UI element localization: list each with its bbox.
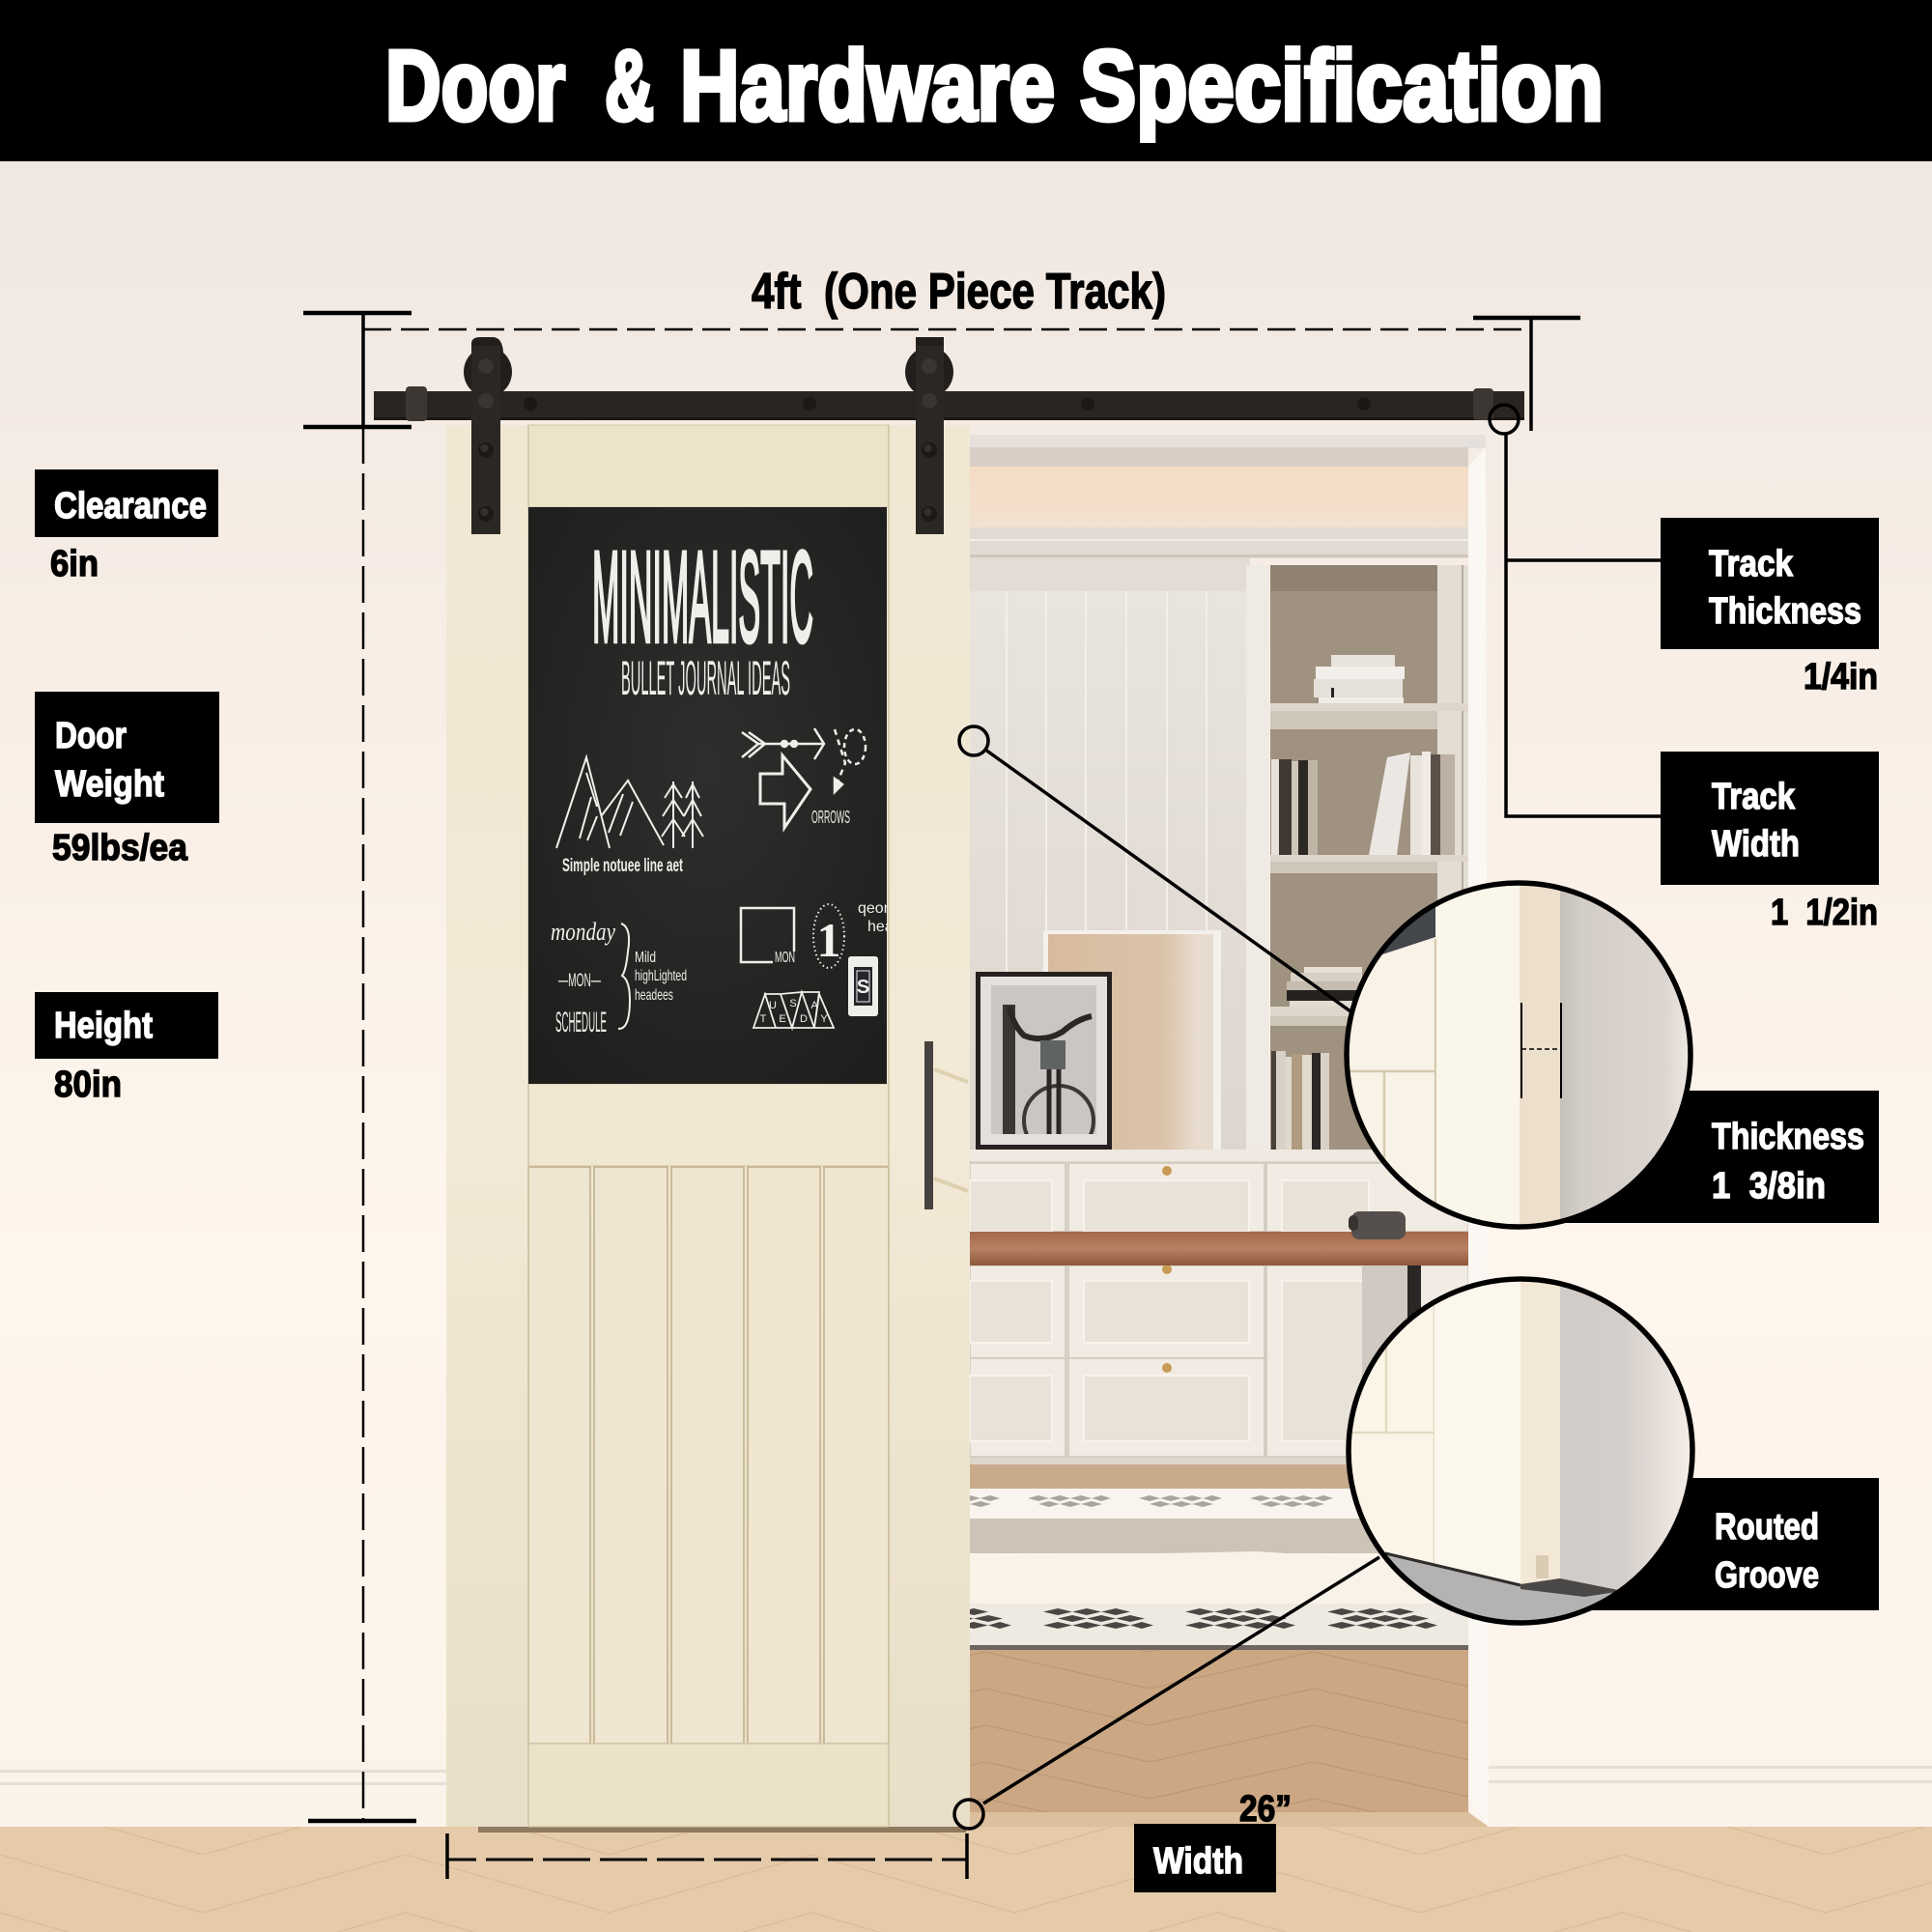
callout: track thickness [1661,518,1879,697]
callout: width: Width [1153,1841,1243,1882]
door floor shadow [478,1827,966,1833]
chalk bunting: tuesday: A [810,1000,818,1011]
callout: width [1134,1789,1292,1892]
chalk S tile: S [857,977,869,998]
callout: door weight [35,692,219,868]
title: Door [385,30,565,141]
cabinets [970,1161,1468,1464]
chalk mountains and trees [556,757,703,848]
callout: track width: Width [1712,824,1800,865]
chalk bunting: tuesday: Y [820,1013,828,1025]
title: & [605,30,654,141]
black title bar [0,0,1932,161]
chalk note: mild highlighted headers [636,951,686,1000]
chalk bunting: tuesday [753,992,834,1028]
thickness marker [1521,1003,1561,1098]
door width dimension line [447,1833,967,1879]
middle rail [528,1084,889,1166]
panelled wall [970,565,1269,1154]
books lower shelf [1287,967,1362,1007]
chalk note: geometric headers: qeom [858,900,896,917]
callout: door thickness: 1 3/8in [1712,1166,1826,1207]
door handle [924,1041,933,1209]
chalk script: monday: monday [551,918,615,946]
books middle shelf left [1271,759,1318,855]
floor [0,1827,1932,1932]
callout: door weight: Weight [55,764,164,805]
chalk MON box [741,908,795,966]
bicycle photo frame [976,972,1112,1155]
callout: height: 80in [54,1065,122,1105]
clearance dimension bracket [303,313,412,427]
track rail [374,391,1524,420]
wooden desk [970,1232,1468,1265]
chalk numeral in dotted circle [813,904,844,968]
chalk note: geometric headers: head [867,919,902,935]
beige art frame [1043,930,1221,1150]
track stop right [1473,388,1493,420]
title: Specification [1080,30,1604,141]
barn door [446,425,970,1827]
callout: door thickness [1546,1091,1879,1223]
leader: routed groove detail [954,1557,1379,1829]
books middle shelf right [1369,752,1455,855]
callout: track width [1661,752,1879,933]
track callout leader lines [1490,405,1661,816]
left hanger [464,337,512,534]
detail circle: routed groove [1347,1277,1694,1633]
ceiling soffit [970,435,1486,528]
desk cup [1349,1211,1406,1239]
title [385,30,1604,141]
callout: clearance [35,469,218,584]
bookshelf [1270,565,1468,1150]
chalk caption: nature line art: Simple notuee line aet [562,856,683,876]
vertical panels [528,1167,889,1744]
bottom rail [528,1744,889,1827]
text: BULLET JOURNAL IDEAS [621,651,790,705]
callout: clearance: Clearance [54,486,207,526]
callout: door weight: 59lbs/ea [52,828,188,868]
track length dimension line [363,318,1580,431]
top rail [528,425,889,507]
chalk note: mild highlighted headers: Mild [635,950,656,966]
callout: track thickness: Track [1709,544,1794,584]
cornice [970,527,1468,591]
callout: routed groove: Routed [1715,1507,1819,1548]
track stop left [406,386,427,421]
baseboard right [1489,1760,1932,1827]
chalkboard panel: ORROWS [811,808,850,827]
callout: clearance: 6in [50,544,99,584]
callout: width: 26” [1239,1789,1292,1830]
room seen through doorway [970,435,1489,1827]
chalk arrows [742,728,866,828]
baseboard left [0,1763,446,1827]
text: MINIMALISTIC [592,526,813,669]
chalk note: mild highlighted headers: highLighted [635,968,687,984]
counter top strip [970,1150,1468,1161]
chalkboard panel: SCHEDULE [555,1007,607,1038]
chalk S tile [848,956,878,1016]
callout: height [35,992,218,1105]
title: Hardware [680,30,1055,141]
callout: track width: Track [1712,777,1796,817]
chalkboard panel [528,507,902,1084]
detail circle: door edge thickness [1346,882,1692,1228]
callout: track thickness: 1/4in [1804,657,1878,697]
door stile edges [528,425,889,1827]
callout: routed groove: Groove [1715,1555,1819,1596]
callout: height: Height [54,1006,153,1046]
chalk bunting: tuesday: D [800,1013,808,1025]
center hanger [905,337,953,534]
chalk MON box: MON [775,950,795,966]
leader: door thickness detail [959,726,1350,1011]
chalk bunting: tuesday: S [789,998,797,1009]
track bolts [524,397,1371,411]
room floor and rug [970,1464,1489,1827]
callout: track thickness: Thickness [1709,591,1861,632]
track length label: 4ft (One Piece Track) [752,264,1166,320]
chalk bunting: tuesday: T [760,1013,767,1025]
door handle shadows [934,1069,968,1191]
door jamb [1468,447,1489,1827]
chalk bunting: tuesday: U [769,1000,777,1011]
callout: track width: 1 1/2in [1771,893,1878,933]
chalk label: MON: —MON— [558,971,601,991]
books top shelf [1314,655,1405,703]
callout: door weight: Door [55,716,127,756]
chalk note: geometric headers [858,904,887,931]
chalk note: mild highlighted headers: headees [635,987,673,1004]
chalk numeral in dotted circle: 1 [817,913,840,967]
callout: door thickness: Thickness [1712,1117,1864,1157]
callout: routed groove [1546,1478,1879,1610]
desk leg [1407,1265,1421,1323]
books bottom shelf [1271,1051,1329,1150]
door height dimension line [308,427,416,1821]
chalk bunting: tuesday: E [779,1013,786,1025]
chalk brace [618,923,630,1029]
